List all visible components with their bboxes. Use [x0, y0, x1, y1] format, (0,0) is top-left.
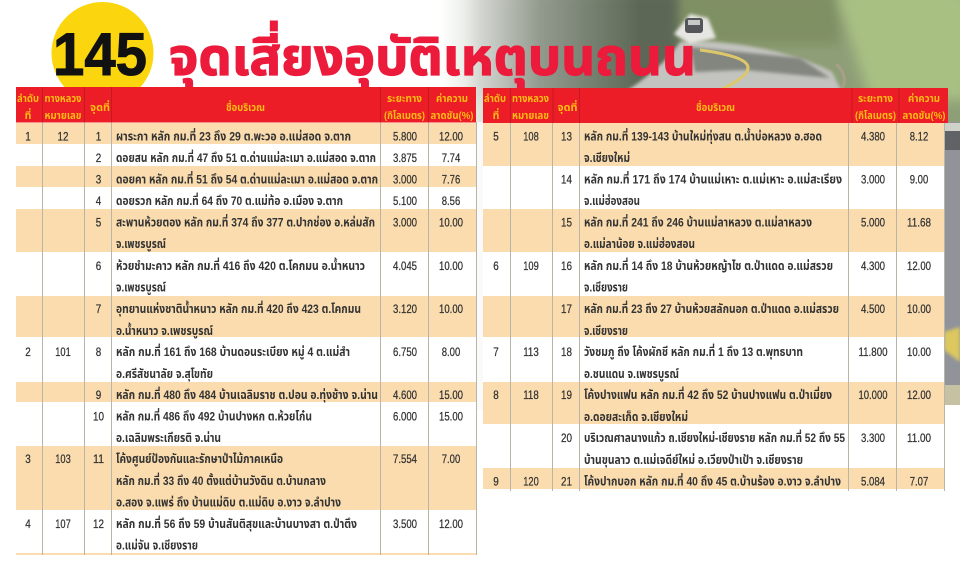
left table rows: 107	[55, 517, 71, 531]
left table rows: อ.เฉลิมพระเกียรติ จ.น่าน	[116, 431, 221, 445]
left table grid	[42, 122, 476, 555]
right table rows: 11.800	[858, 345, 888, 359]
left table rows: 8.56	[442, 194, 461, 208]
left table header: (กิโลเมตร)	[384, 110, 425, 122]
badge number: 145	[53, 21, 147, 88]
left table bands	[16, 123, 476, 555]
left table header: ลาดชัน(%)	[430, 110, 474, 122]
icon: car on road	[685, 18, 703, 33]
left table rows: 12	[58, 130, 69, 144]
right table rows: หลัก กม.ที่ 241 ถึง 246 บ้านแม่ลาหลวง ต.แม่ลาหลวง	[584, 213, 812, 230]
right table rows: 3.300	[861, 431, 885, 445]
left table rows: 4.045	[393, 259, 417, 273]
right table rows: จ.แม่ฮ่องสอน	[584, 194, 640, 208]
left table rows: 5.100	[393, 194, 417, 208]
right table rows: 109	[523, 259, 539, 273]
left table header: ระยะทาง	[387, 93, 422, 105]
left table rows: 15.00	[439, 388, 463, 402]
left table header: ทางหลวง	[44, 93, 82, 105]
right table rows: หลัก กม.ที่ 23 ถึง 27 บ้านห้วยสลักนอก ต.ป่าแดด อ.แม่สรวย	[584, 300, 839, 316]
right table header: ลำดับ	[484, 93, 506, 105]
left table rows: อ.สอง จ.แพร่ ถึง บ้านแม่ดิบ ต.แม่ดิบ อ.งาว จ.ลำปาง	[116, 496, 341, 510]
left table rows: 7	[96, 302, 102, 316]
right table rows: 13	[561, 130, 572, 144]
right table header: ทางหลวง	[512, 93, 549, 105]
left table rows: 2	[25, 345, 31, 359]
right table rows: 10.00	[907, 302, 931, 316]
left table rows: ดอยสน หลัก กม.ที่ 47 ถึง 51 ต.ด่านแม่ละเมา อ.แม่สอด จ.ตาก	[116, 149, 376, 165]
left table header: ค่าความ	[436, 92, 468, 105]
right table header: หมายเลข	[512, 110, 549, 122]
left table rows: อ.แม่จัน จ.เชียงราย	[116, 538, 198, 552]
left table rows: 8	[96, 345, 102, 359]
right table rows: จ.เชียงใหม่	[584, 151, 630, 165]
right table rows: หลัก กม.ที่ 14 ถึง 18 บ้านห้วยหญ้าไซ ต.ป่าแดด อ.แม่สรวย	[584, 257, 833, 273]
right table header: ชื่อบริเวณ	[696, 100, 735, 114]
left table rows: 1	[25, 130, 31, 144]
left table rows: 3.500	[393, 517, 417, 531]
right table rows: 118	[523, 388, 539, 402]
left table header	[16, 87, 476, 122]
right table rows	[493, 127, 931, 488]
left table header: หมายเลข	[44, 110, 82, 122]
left table header: ลำดับ	[17, 93, 39, 105]
left table rows: 7.74	[442, 151, 461, 165]
left table rows: 7.00	[442, 452, 461, 466]
right table rows: โค้งปางแฟน หลัก กม.ที่ 42 ถึง 52 บ้านปางแฟน ต.ป่าเมี่ยง	[584, 386, 832, 402]
left table rows: หลัก กม.ที่ 486 ถึง 492 บ้านปางหก ต.ห้วยโก๋น	[116, 407, 312, 424]
right table header: (กิโลเมตร)	[855, 110, 896, 122]
right table header: ลาดชัน(%)	[902, 110, 946, 122]
left table rows: หลัก กม.ที่ 161 ถึง 168 บ้านดอนระเบียง หมู่ 4 ต.แม่สำ	[116, 343, 350, 360]
badge: yellow circle	[52, 2, 154, 104]
left table rows: จ.เพชรบูรณ์	[116, 237, 166, 252]
left table rows: 11	[93, 452, 104, 466]
left table rows: 6.000	[393, 410, 417, 424]
left table rows: 3.120	[393, 302, 417, 316]
left table rows: สะพานห้วยตอง หลัก กม.ที่ 374 ถึง 377 ต.ปากช่อง อ.หล่มสัก	[116, 213, 375, 230]
left table rows: 12.00	[439, 130, 463, 144]
left table rows: 5.800	[393, 130, 417, 144]
right table rows: 17	[561, 302, 572, 316]
left table rows: ผาระกา หลัก กม.ที่ 23 ถึง 29 ต.พะวอ อ.แม่สอด จ.ตาก	[116, 127, 351, 144]
right table rows: 11.68	[907, 216, 931, 230]
left table rows: หลัก กม.ที่ 480 ถึง 484 บ้านเฉลิมราช ต.ปอน อ.ทุ่งช้าง จ.น่าน	[116, 386, 378, 402]
right table rows: 5.000	[861, 216, 885, 230]
right table rows: จ.เชียงราย	[584, 280, 628, 294]
left table rows: 10.00	[439, 259, 463, 273]
right table rows: 108	[523, 130, 539, 144]
right table rows: อ.ชนแดน จ.เพชรบูรณ์	[584, 367, 679, 382]
left table rows: จ.เพชรบูรณ์	[116, 280, 166, 296]
left table rows: 1	[96, 130, 102, 144]
right table rows: จ.เชียงราย	[584, 324, 628, 338]
left table rows: อ.น้ำหนาว จ.เพชรบูรณ์	[116, 322, 213, 339]
right table rows: 9.00	[910, 172, 929, 186]
left table rows: 12.00	[439, 517, 463, 531]
left table rows: 3.875	[393, 151, 417, 165]
right table rows: 14	[561, 172, 572, 186]
left table rows: 5	[96, 216, 102, 230]
right table rows: 5.084	[861, 474, 885, 488]
left table rows: 12	[93, 517, 104, 531]
right table rows: วังชมภู ถึง โค้งผักชี หลัก กม.ที่ 1 ถึง 13 ต.พุทธบาท	[584, 343, 803, 360]
left table header: ที่	[25, 108, 32, 122]
left table header: ชื่อบริเวณ	[226, 100, 265, 114]
right table rows: 120	[523, 474, 539, 488]
left table rows: 3.000	[393, 216, 417, 230]
right table rows: บ้านขุนลาว ต.แม่เจดีย์ใหม่ อ.เวียงป่าเป้า จ.เชียงราย	[584, 453, 803, 467]
left table rows	[25, 127, 463, 552]
right table rows: หลัก กม.ที่ 171 ถึง 174 บ้านแม่เหาะ ต.แม่เหาะ อ.แม่สะเรียง	[584, 170, 842, 186]
left table rows: 9	[96, 388, 102, 402]
right table rows: 21	[561, 474, 572, 488]
right table rows: 8	[493, 388, 499, 402]
right table rows: 5	[493, 130, 499, 144]
right table rows: อ.แม่ลาน้อย จ.แม่ฮ่องสอน	[584, 237, 695, 251]
left table rows: โค้งศูนย์ป้องกันและรักษาป่าไม้ภาคเหนือ	[116, 452, 283, 467]
right table rows: 12.00	[907, 388, 931, 402]
left table rows: 103	[55, 452, 71, 466]
left table rows: 10.00	[439, 302, 463, 316]
right table rows: 3.000	[861, 172, 885, 186]
right table rows: 12.00	[907, 259, 931, 273]
right table rows: 10.00	[907, 345, 931, 359]
right table rows: 4.380	[861, 130, 885, 144]
right table rows: 20	[561, 431, 572, 445]
right table bands	[483, 123, 944, 489]
left table rows: 6	[96, 259, 102, 273]
right table rows: 7	[493, 345, 499, 359]
right table rows: 15	[561, 216, 572, 230]
left table rows: 4	[25, 517, 31, 531]
right table header: ระยะทาง	[858, 93, 893, 105]
left table rows: 10.00	[439, 216, 463, 230]
left table rows: ห้วยชำมะคาว หลัก กม.ที่ 416 ถึง 420 ต.โคกมน อ.น้ำหนาว	[116, 257, 365, 273]
left table rows: 15.00	[439, 410, 463, 424]
left table rows: ดอยรวก หลัก กม.ที่ 64 ถึง 70 ต.แม่ท้อ อ.เมือง จ.ตาก	[116, 192, 343, 208]
left table rows: 6.750	[393, 345, 417, 359]
right table rows: 19	[561, 388, 572, 402]
right table rows: 7.07	[910, 474, 929, 488]
right table rows: 9	[493, 474, 499, 488]
right table rows: 6	[493, 259, 499, 273]
right table header: ที่	[493, 108, 500, 122]
right table rows: 16	[561, 259, 572, 273]
left table rows: 101	[55, 345, 71, 359]
left table rows: 3	[96, 172, 102, 186]
panel: right table	[483, 88, 948, 491]
right table rows: 10.000	[858, 388, 888, 402]
left table rows: 2	[96, 151, 102, 165]
right table rows: 11.00	[907, 431, 931, 445]
left table rows: 10	[93, 410, 104, 424]
left table rows: หลัก กม.ที่ 33 ถึง 40 ตั้งแต่บ้านวังดิน ต.บ้านกลาง	[116, 472, 326, 488]
left table rows: อ.ศรีสัชนาลัย จ.สุโขทัย	[116, 367, 213, 381]
left table rows: 7.554	[393, 452, 417, 466]
right table header: ค่าความ	[908, 92, 940, 105]
right table rows: 18	[561, 345, 572, 359]
right table rows: บริเวณศาลนางแก้ว ถ.เชียงใหม่-เชียงราย หลัก กม.ที่ 52 ถึง 55	[584, 429, 845, 445]
right table rows: หลัก กม.ที่ 139-143 บ้านใหม่ทุ่งสน ต.น้ำบ่อหลวง อ.ฮอด	[584, 127, 822, 144]
strip between tables	[476, 122, 483, 410]
left table rows: 8.00	[442, 345, 461, 359]
right table rows: 113	[523, 345, 539, 359]
right table rows: อ.ดอยสะเก็ด จ.เชียงใหม่	[584, 410, 688, 424]
right table header: จุดที่	[558, 100, 578, 114]
left table rows: 4.600	[393, 388, 417, 402]
left table rows: หลัก กม.ที่ 56 ถึง 59 บ้านสันติสุขและบ้านบางสา ต.ป่าตึง	[116, 515, 357, 531]
right table rows: โค้งปากบอก หลัก กม.ที่ 40 ถึง 45 ต.บ้านร้อง อ.งาว จ.ลำปาง	[584, 472, 841, 488]
right table rows: 4.300	[861, 259, 885, 273]
background: road photo	[430, 0, 960, 407]
left table rows: 7.76	[442, 172, 461, 186]
right table rows: 8.12	[910, 130, 929, 144]
right table rows: 4.500	[861, 302, 885, 316]
left table rows: ดอยคา หลัก กม.ที่ 51 ถึง 54 ต.ด่านแม่ละเมา อ.แม่สอด จ.ตาก	[116, 170, 378, 186]
left table header: จุดที่	[90, 100, 110, 114]
right table header	[483, 88, 948, 123]
left table rows: 3	[25, 452, 31, 466]
left table rows: 4	[96, 194, 102, 208]
left table rows: 3.000	[393, 172, 417, 186]
left table rows: อุทยานแห่งชาติน้ำหนาว หลัก กม.ที่ 420 ถึง 423 ต.โคกมน	[116, 300, 361, 316]
panel: left table	[16, 87, 476, 555]
title: จุดเสี่ยงอุบัติเหตุบนถนน	[169, 21, 696, 88]
right table grid	[510, 122, 944, 491]
